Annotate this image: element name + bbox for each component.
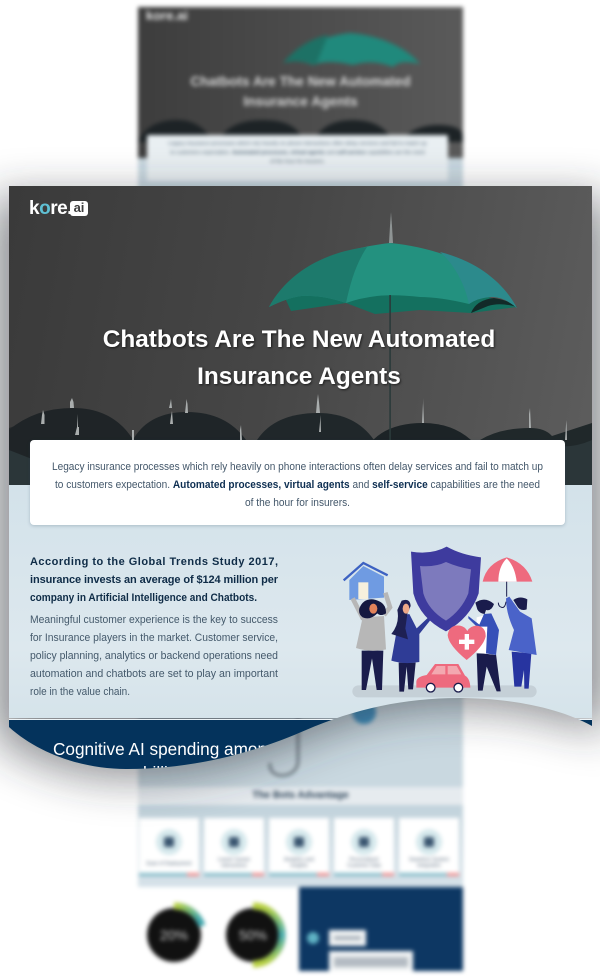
small umbrella spikes xyxy=(41,394,567,440)
tile: Human interaction: Leaner human xyxy=(218,857,250,863)
tile: Personalized Customer Data xyxy=(334,818,394,876)
logo ai badge: ai xyxy=(74,200,84,215)
heart with medical cross xyxy=(448,626,486,660)
tile: Seamless System Integration: Integration xyxy=(417,863,441,869)
shield xyxy=(411,547,481,631)
tile: Seamless System Integration: Seamless System xyxy=(409,857,449,863)
back sheet umbrella xyxy=(138,31,465,144)
back sheet advantage tiles xyxy=(138,805,463,887)
title: Chatbots Are The New Automated xyxy=(103,326,495,353)
umbrella pole xyxy=(389,295,391,443)
house xyxy=(344,563,388,600)
back sheet title xyxy=(188,74,413,112)
bold statistic paragraph: According to the Global Trends Study 2017, xyxy=(30,556,278,568)
hero illustration: teal umbrella and dark umbrellas xyxy=(9,213,592,485)
back sheet logo: kore.ai xyxy=(146,8,188,23)
logo ai badge xyxy=(70,201,88,216)
back sheet blue dot xyxy=(352,700,376,724)
back sheet hero with umbrella xyxy=(138,7,463,158)
intro text xyxy=(52,462,543,506)
person one xyxy=(353,593,390,690)
bold statistic paragraph: insurance invests an average of $124 million per xyxy=(30,574,279,586)
lower section background xyxy=(9,485,592,718)
back sheet white band xyxy=(138,887,299,971)
dark umbrella row xyxy=(9,408,592,485)
intro text: of the hour for insurers. xyxy=(245,497,350,509)
tile: Personalized Customer Data: Customer Data xyxy=(347,863,381,869)
body paragraph: policy planning, analytics or backend operations need xyxy=(30,650,278,662)
tile: Human interaction xyxy=(204,818,264,876)
back sheet donut charts: 20% and 50%: 20% xyxy=(160,927,188,943)
cognitive AI spending headline line 1: Cognitive AI spending among insurers xyxy=(53,739,342,759)
back sheet intro box: to customers expectation. Automated processes, virtual agents and self-service capabilities are the need xyxy=(170,150,425,156)
tile: Analytics and Insights xyxy=(269,818,329,876)
back sheet donut charts: 20% and 50%: 50% xyxy=(239,927,267,943)
back sheet donut charts: 20% and 50% xyxy=(144,899,289,971)
back sheet title: Insurance Agents xyxy=(243,94,358,109)
hero background xyxy=(9,186,592,440)
tile: Human interaction: interactions xyxy=(221,863,247,869)
intro box xyxy=(30,440,564,524)
tile: Ease of Deployment: Ease of Deployment xyxy=(146,861,192,867)
illustration: people holding insurance symbols xyxy=(343,546,537,698)
back sheet intro box: Legacy insurance processes which rely heavily on phone interactions often delay services and fail to match up xyxy=(168,141,427,147)
body paragraph: role in the value chain. xyxy=(30,686,130,698)
tile: Ease of Deployment xyxy=(139,818,199,876)
title xyxy=(104,330,496,391)
intro text: Legacy insurance processes which rely heavily on phone interactions often delay services and fail to match up xyxy=(52,461,543,473)
back sheet hook of umbrella handle xyxy=(266,718,302,780)
intro text: to customers expectation. Automated processes, virtual agents and self-service capabilities are the need xyxy=(55,479,540,491)
back sheet heading: The Bots Advantage xyxy=(138,787,463,805)
umbrella canopy xyxy=(269,243,517,308)
ground xyxy=(352,685,537,697)
back sheet title: Chatbots Are The New Automated xyxy=(190,74,411,89)
person four xyxy=(506,597,537,689)
logo: kore.ai xyxy=(30,200,88,216)
bold statistic paragraph: company in Artificial Intelligence and Chatbots. xyxy=(30,592,257,604)
navy band xyxy=(9,719,592,769)
person two xyxy=(391,600,430,692)
umbrella inner underside xyxy=(286,295,517,314)
teal umbrella xyxy=(269,212,517,443)
body paragraph: Meaningful customer experience is the key to success xyxy=(30,614,278,626)
main card clipped by wave xyxy=(9,186,592,769)
title: Insurance Agents xyxy=(197,363,401,390)
back sheet intro box xyxy=(147,135,448,181)
car xyxy=(416,664,470,692)
umbrella spike xyxy=(389,212,393,243)
tile: Analytics and Insights: Insights xyxy=(290,863,308,869)
back sheet heading: The Bots Advantage: The Bots Advantage xyxy=(252,790,349,801)
tile: Seamless System Integration xyxy=(399,818,459,876)
chat avatar dot xyxy=(307,932,319,944)
chat bubble two xyxy=(329,951,413,971)
tile: Personalized Customer Data: Personalized xyxy=(350,857,378,863)
body paragraph: for Insurance players in the market. Customer service, xyxy=(30,632,278,644)
tile: Analytics and Insights: Analytics and xyxy=(284,857,314,863)
cognitive AI spending headline line 2: billion xyxy=(143,763,187,783)
body paragraph xyxy=(30,615,278,695)
back sheet navy chat panel xyxy=(299,887,463,971)
logo wordmark: kore. xyxy=(29,198,72,219)
bold statistic paragraph xyxy=(30,557,278,604)
chat bubble one xyxy=(329,930,366,946)
red and white umbrella xyxy=(483,557,532,607)
back sheet intro box: of the hour for insurers. xyxy=(270,159,325,165)
body paragraph: automation and chatbots are set to play an important xyxy=(30,668,278,680)
back sheet: blurred infographic page behind the card xyxy=(138,7,463,971)
person three xyxy=(468,600,501,691)
